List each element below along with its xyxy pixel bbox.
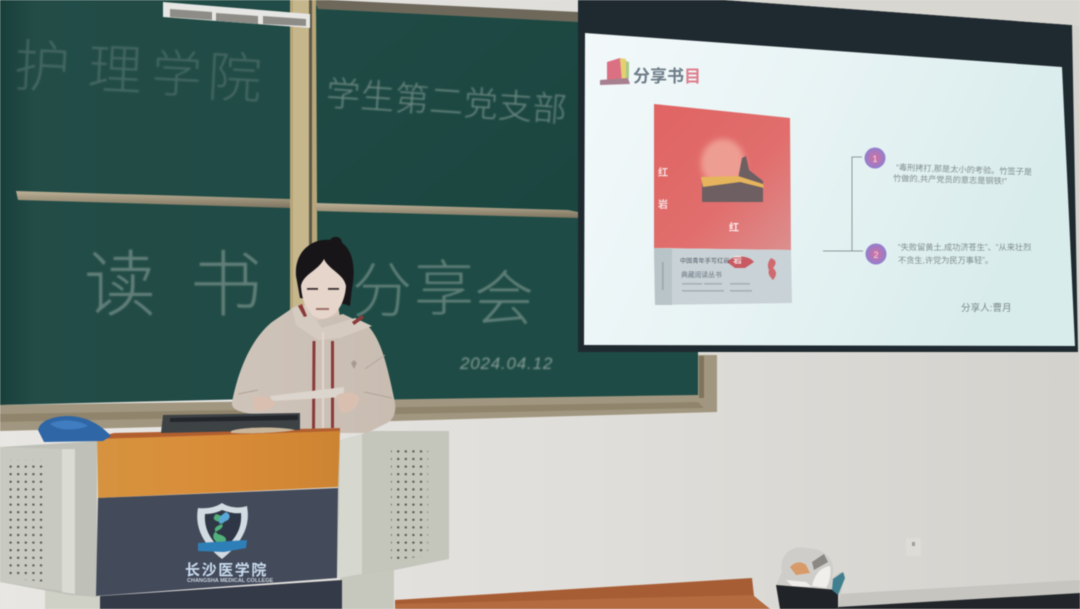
college crest (197, 503, 248, 559)
pedestal right (340, 568, 394, 609)
book cover: 岩 (658, 198, 668, 211)
left speaker grille (8, 460, 47, 582)
left hand (253, 396, 276, 411)
book band fine print (682, 283, 752, 292)
chalk heading: 读书: 读 (84, 246, 156, 326)
chalk heading: 分享会: 分 (352, 258, 412, 325)
book lower band (654, 248, 792, 305)
black device on lectern (161, 413, 300, 433)
book figure (702, 156, 763, 202)
chalk heading: 护理学院: 院 (206, 48, 263, 110)
book red upper (654, 104, 791, 250)
numbered badge 1: 1 (872, 154, 878, 164)
right speaker grille (391, 447, 428, 560)
pedestal dark front (100, 580, 342, 609)
orange wood panel (97, 431, 340, 498)
board panel: lower right (316, 205, 698, 403)
quote 1: “毒刑拷打,那是太小的考验。竹签子是 (896, 162, 1032, 177)
slide title: 分享书目 (633, 66, 701, 86)
chalk heading: 分享会 (352, 256, 534, 333)
book spine shade (654, 248, 672, 305)
right hand (336, 392, 359, 412)
centre frame post (290, 0, 318, 404)
baseboard (838, 580, 1080, 609)
chalk heading: 学生第二党支部: 学生第二党支部 (325, 75, 568, 130)
connector lines (823, 157, 863, 251)
wall strip upper right (725, 0, 1080, 27)
slide title icon: books (600, 58, 630, 85)
wall socket (906, 538, 921, 556)
book sun (701, 139, 745, 187)
bottom frame (0, 355, 717, 431)
left wing highlight (62, 449, 75, 594)
glasses on lectern (231, 427, 295, 433)
post highlight (293, 0, 310, 402)
bottom frame groove (0, 402, 704, 422)
book cover (654, 104, 792, 305)
lectern top edge (97, 428, 340, 441)
quote 2: “失败留黄土,成功济苍生”、“从来壮烈 (898, 242, 1031, 252)
chalk rail left (16, 191, 290, 208)
numbered badge 1 (864, 148, 886, 168)
numbered badge 2: 2 (873, 250, 879, 260)
quote 2: 不贪生,许党为民万事轻”。 (898, 255, 993, 265)
right wing back (338, 431, 449, 578)
book title vertical: 红 (658, 166, 668, 179)
hood collar (292, 305, 372, 340)
college English name: CHANGSHA MEDICAL COLLEGE (187, 578, 274, 584)
sheet of paper (270, 387, 344, 401)
book side mark (768, 258, 776, 280)
book cover: 典藏阅读丛书 (681, 270, 722, 279)
blue bag (38, 416, 111, 442)
chalk heading: 护理学院: 护 (12, 34, 72, 100)
chalk rail right (316, 203, 578, 218)
navy front panel (96, 488, 338, 596)
student reading (232, 237, 395, 433)
wastebasket with rubbish (776, 547, 845, 609)
top frame of right board (314, 0, 578, 22)
projector screen (578, 0, 1080, 352)
book band text: 中国青年手写红岩 (680, 257, 730, 265)
book fan emblem (727, 256, 754, 268)
chalk heading: 护理学院: 理 (86, 39, 143, 102)
book ribbon (701, 176, 764, 188)
hair back (296, 237, 354, 306)
pedestal left (45, 590, 100, 609)
numbered badge 2 (866, 244, 886, 264)
face (301, 259, 346, 319)
chalk heading: 分享会: 会 (474, 266, 534, 333)
chalk heading: 护理学院 (12, 34, 263, 110)
book cover: 红 (729, 221, 739, 234)
book spine text (662, 262, 664, 290)
chalk heading: 护理学院: 学 (150, 46, 203, 104)
board panel: lower left (0, 190, 292, 405)
left wing back (0, 441, 97, 597)
drawstring and zipper stripes (298, 304, 364, 432)
right wing highlight (338, 434, 362, 578)
board panel: upper left (0, 0, 292, 200)
chalk heading: 读书 (84, 246, 262, 326)
projected slide (584, 33, 1075, 346)
sharer credit: 分享人:曹月 (961, 302, 1012, 314)
ceiling-mounted projector lamp (163, 2, 310, 28)
book cover: 岩 (733, 254, 742, 265)
board panel: upper right (316, 0, 580, 218)
screen dark casing (578, 0, 1078, 352)
blackboard (0, 0, 717, 431)
wooden ledge at floor (395, 578, 770, 609)
chalk date: 2024.04.12 (459, 354, 553, 373)
right frame groove (699, 356, 704, 398)
eyes and mouth (307, 288, 339, 310)
hoodie badge (351, 360, 357, 369)
left wing face (0, 447, 62, 591)
neck (304, 305, 342, 330)
quote 1 (893, 162, 1032, 186)
lectern (0, 428, 449, 609)
post dark edge (309, 0, 312, 402)
zipper (322, 332, 324, 428)
college name: 长沙医学院 (185, 561, 268, 579)
chalk heading: 分享会: 享 (414, 256, 474, 323)
chalk heading: 读书: 书 (190, 246, 262, 326)
hoodie body (232, 305, 395, 433)
sleeve fold lines (238, 355, 392, 398)
quote 2 (898, 242, 1031, 265)
quote 1: 竹做的,共产党员的意志是钢铁!” (893, 173, 1007, 186)
